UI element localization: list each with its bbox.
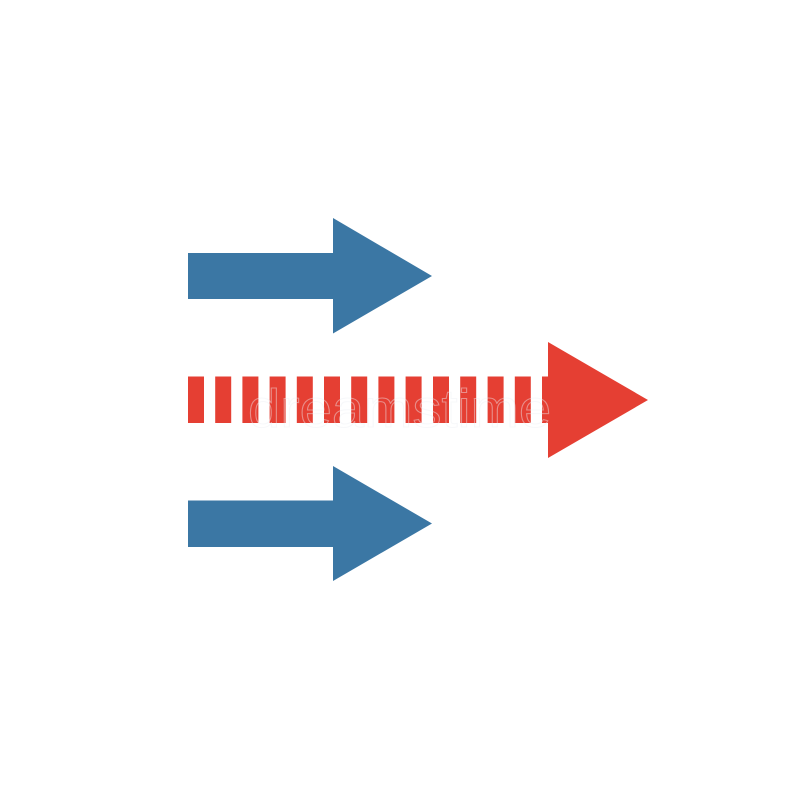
arrow: bottom blue (188, 466, 432, 581)
watermark: dreamstime (248, 378, 551, 439)
arrow: middle red dashed (188, 342, 648, 458)
arrow: top blue (188, 218, 432, 334)
